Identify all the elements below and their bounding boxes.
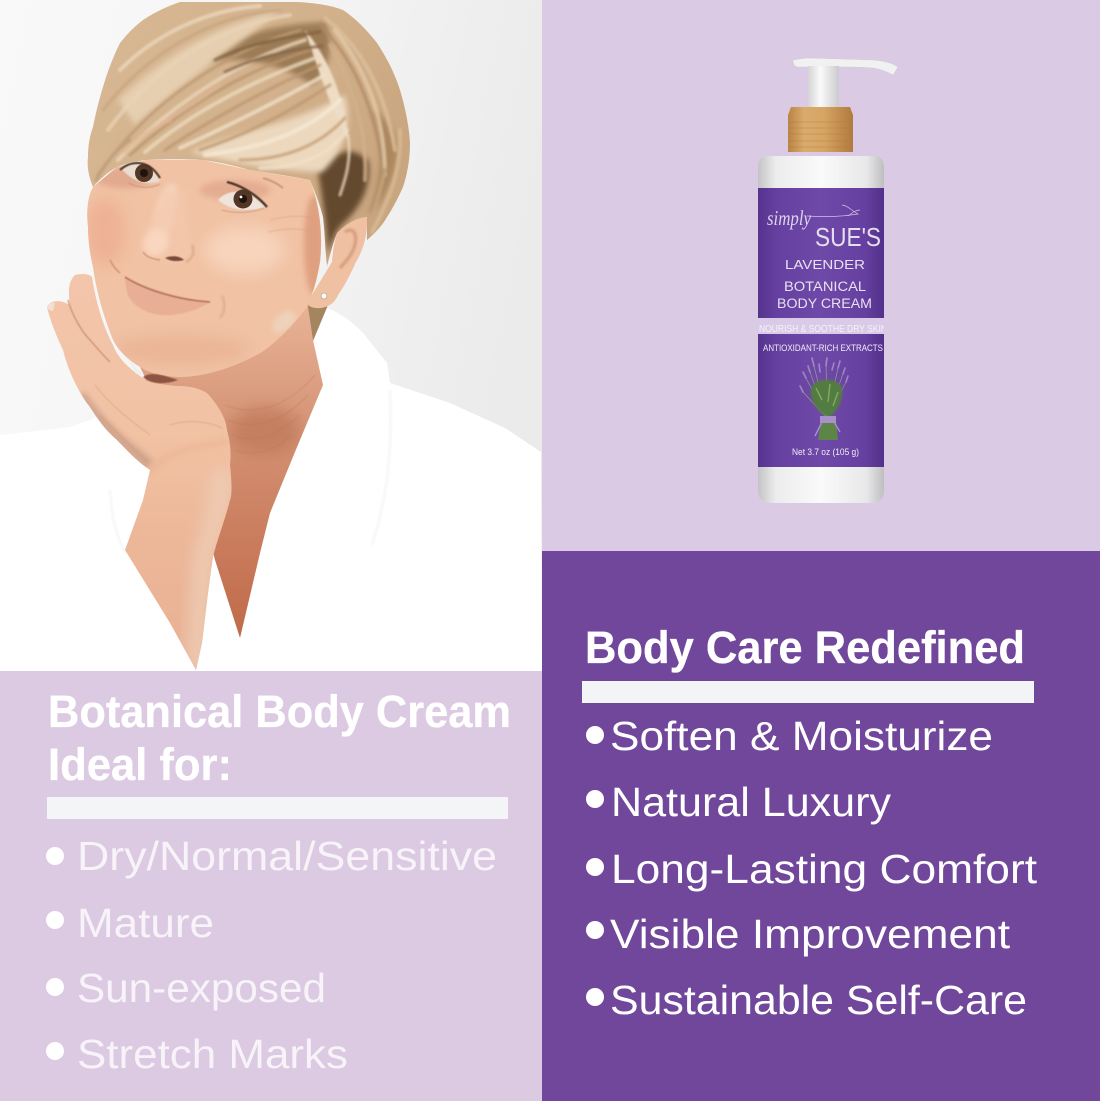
- product bottle: [758, 58, 898, 503]
- bottle body: [758, 156, 884, 503]
- smile and lips: [110, 260, 224, 318]
- panel: portrait photo: [0, 0, 542, 671]
- hair at the nape: [308, 305, 328, 341]
- brand name: SUE'S: [815, 222, 881, 252]
- band slogan: NOURISH & SOOTHE DRY SKIN: [759, 323, 887, 335]
- heading: ideal for: Ideal for:: [48, 739, 232, 790]
- bullet: natural luxury: Natural Luxury: [611, 779, 892, 825]
- hair: [88, 2, 410, 266]
- right eye: [218, 178, 315, 232]
- nose: [140, 190, 194, 263]
- bullet: soften and moisturize: Soften & Moisturize: [610, 713, 993, 759]
- product title: BOTANICAL: [784, 279, 867, 294]
- extract claim: ANTIOXIDANT-RICH EXTRACTS: [763, 343, 883, 353]
- broad light fringe: [190, 95, 348, 172]
- pearl earring: [321, 293, 327, 299]
- neck and chest: [140, 300, 323, 638]
- panel: ideal for: [0, 671, 542, 1101]
- bamboo collar: [788, 107, 853, 152]
- fringe strands: [96, 6, 400, 235]
- heading rule: [47, 797, 508, 819]
- heading: Body Care Redefined: [585, 622, 1025, 673]
- bullet: sun-exposed: Sun-exposed: [77, 965, 326, 1011]
- light band: [758, 318, 884, 334]
- heading: botanical body cream: Botanical Body Cream: [48, 686, 511, 737]
- bullet: long-lasting comfort: Long-Lasting Comfort: [611, 846, 1038, 892]
- panel: body care redefined: [542, 551, 1100, 1101]
- ear: [307, 217, 367, 308]
- net weight: Net 3.7 oz (105 g): [792, 447, 859, 457]
- brand script: simply: [767, 206, 812, 230]
- bullet: stretch marks: Stretch Marks: [77, 1031, 348, 1077]
- bullet: visible improvement: Visible Improvement: [610, 911, 1011, 957]
- variant name: LAVENDER: [785, 257, 865, 272]
- brand flourish: [807, 205, 860, 217]
- product title line two: BODY CREAM: [777, 296, 872, 311]
- bullet: mature: Mature: [77, 900, 214, 946]
- heading rule: [582, 681, 1034, 703]
- panel: lavender product background: [542, 0, 1100, 551]
- left eye: [120, 163, 160, 187]
- right side strands: [325, 18, 395, 150]
- product label: [758, 188, 887, 467]
- white bathrobe: [0, 308, 542, 671]
- lavender bouquet: [800, 358, 848, 440]
- pump head: [793, 58, 898, 75]
- face: [85, 160, 324, 377]
- pump stem: [808, 66, 839, 108]
- hand resting under chin and arm: [47, 274, 232, 670]
- bullet: dry/normal/sensitive: Dry/Normal/Sensitive: [77, 833, 497, 879]
- shadow between hand and chin: [135, 372, 178, 384]
- dark hair shadows: [318, 151, 369, 255]
- bullet: sustainable self-care: Sustainable Self-Care: [610, 977, 1027, 1023]
